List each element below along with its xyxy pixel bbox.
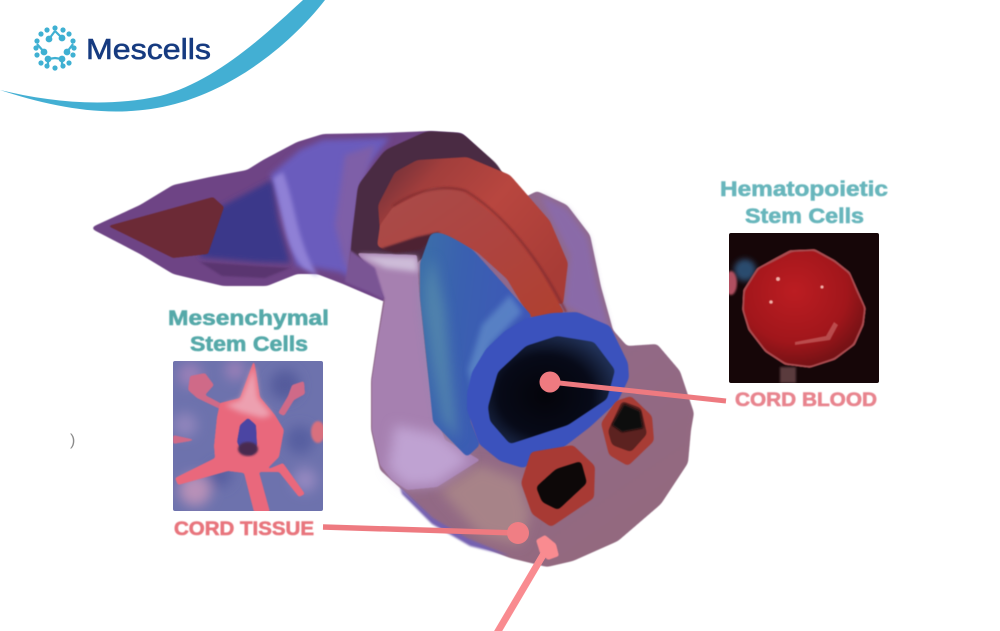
hematopoietic heading: Stem Cells — [745, 205, 864, 228]
mesenchymal heading — [168, 307, 329, 356]
cone light streak — [468, 295, 522, 395]
neighbouring cell: right edge — [311, 421, 325, 443]
neighbouring cells — [173, 373, 305, 444]
artery: right — [601, 396, 654, 466]
shadow between vessels — [393, 188, 566, 312]
red vessel: back — [378, 157, 568, 305]
mesenchymal heading: Stem Cells — [190, 333, 308, 356]
highlights — [769, 277, 838, 345]
cell highlight — [225, 366, 272, 418]
cell body — [744, 251, 864, 366]
tail: maroon inner — [108, 197, 224, 258]
cord tissue label: CORD TISSUE — [174, 519, 314, 540]
tail: pale streak — [273, 172, 318, 276]
disc: warm shade — [440, 465, 530, 545]
tail: blue-violet band — [270, 138, 390, 288]
light lavender fold — [357, 253, 480, 490]
purple wrapper and disc — [371, 191, 694, 567]
main pink cell — [175, 360, 305, 512]
pointer: third line — [497, 535, 559, 631]
blue vein cone — [420, 233, 532, 457]
lavender top highlight — [358, 255, 418, 272]
logo wordmark: Mescells — [86, 34, 211, 66]
umbilical cord illustration — [90, 131, 694, 567]
hematopoietic heading — [720, 178, 888, 228]
pink background cell — [729, 270, 738, 296]
cord tail — [90, 131, 493, 302]
red blood stem cell rim — [742, 249, 866, 368]
hematopoietic stem cell image — [725, 233, 879, 383]
logo icon: cell ring — [33, 25, 77, 71]
mesenchymal stem cell image — [173, 360, 325, 512]
mesenchymal heading: Mesenchymal — [168, 307, 329, 330]
tail: lower violet — [200, 262, 290, 278]
nucleus shade — [238, 442, 258, 456]
blue vein ring — [467, 312, 629, 468]
cord blood label: CORD BLOOD — [735, 390, 877, 411]
artery lumen: lower — [536, 461, 587, 510]
artery lumen shade: right — [612, 404, 643, 432]
vein lumen — [488, 336, 615, 444]
background blobs — [173, 360, 317, 506]
disc: lower rim violet — [400, 487, 510, 556]
artery lumen: right — [608, 401, 647, 452]
hematopoietic heading: Hematopoietic — [720, 178, 888, 201]
cell nucleus — [237, 418, 257, 455]
header swoosh — [0, 0, 325, 111]
open cup interior — [348, 131, 525, 285]
blue background cell — [734, 259, 756, 281]
lavender highlight — [388, 425, 470, 486]
pointer: cord tissue — [323, 522, 529, 544]
cone teal highlight — [425, 255, 458, 440]
stem below the cell — [780, 367, 796, 383]
right wrapper fold — [540, 195, 610, 330]
tail: right lilac band — [335, 145, 375, 290]
tail: dark blue shade — [200, 180, 290, 263]
stray bracket mark: ) — [70, 432, 75, 449]
logo — [33, 25, 211, 71]
pointer: cord blood — [540, 372, 726, 401]
artery: lower — [521, 445, 595, 527]
left lobe of tail — [345, 250, 385, 300]
shadow below the red vessel — [380, 232, 440, 253]
red vessel: front — [377, 187, 565, 318]
